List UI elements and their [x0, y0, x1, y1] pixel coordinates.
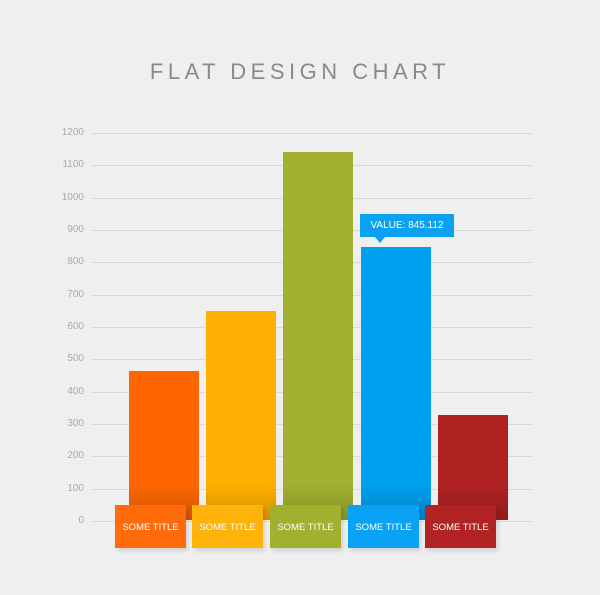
chart: SOME TITLE — [199, 522, 256, 533]
chart: SOME TITLE — [432, 522, 489, 533]
chart: SOME TITLE — [355, 522, 412, 533]
chart: 300 — [67, 418, 84, 429]
chart: 600 — [67, 321, 84, 332]
tooltip — [360, 214, 454, 237]
chart: 1100 — [62, 159, 84, 170]
bar: orange — [129, 371, 199, 520]
bar: yellow — [206, 311, 276, 520]
chart: 500 — [67, 353, 84, 364]
labels: SOME TITLE — [122, 522, 179, 533]
bar: red — [438, 415, 508, 520]
bar: green — [283, 152, 353, 520]
chart: 0 — [78, 515, 84, 526]
tooltip: VALUE: 845.112 — [370, 220, 444, 231]
chart: 400 — [67, 386, 84, 397]
chart: 800 — [67, 256, 84, 267]
chart: 100 — [67, 483, 84, 494]
chart: 900 — [67, 224, 84, 235]
chart: 1200 — [62, 127, 84, 138]
y axis labels — [62, 127, 84, 526]
labels — [115, 505, 186, 548]
chart: 700 — [67, 289, 84, 300]
chart: SOME TITLE — [277, 522, 334, 533]
chart: 1000 — [62, 192, 84, 203]
title: FLAT DESIGN CHART — [150, 59, 450, 84]
chart: 200 — [67, 450, 84, 461]
bar: blue — [361, 247, 431, 520]
